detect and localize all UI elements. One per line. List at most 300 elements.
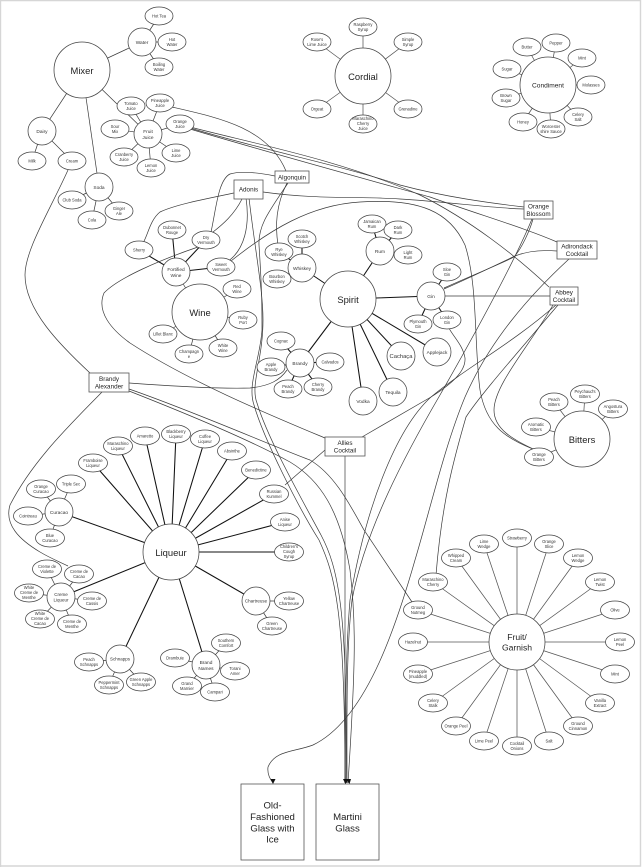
node: Creme de Cacao: Creme de (70, 569, 88, 574)
node: Rum: Rum (375, 249, 385, 255)
glass box: Martini Glass: Glass (335, 823, 360, 834)
arrowhead: Old-Fashioned (270, 779, 276, 784)
node: Celery Stalk: Celery (427, 698, 439, 703)
node: Bitters: Bitters (569, 434, 596, 445)
node: Grand Marnier: Grand (181, 681, 193, 686)
node: Wine: Wine (189, 307, 211, 318)
node: Vanilla Extract: Vanilla (594, 698, 606, 703)
node: Peppermint Schnapps: Schnapps (100, 685, 118, 690)
node: Fortified Wine: Fortified (167, 268, 185, 273)
node: Sour Mix: Mix (112, 129, 118, 134)
node: Lime Wedge: Wedge (478, 544, 491, 549)
node: Champagne: e (188, 354, 191, 359)
node: Rye Whiskey: Rye (275, 247, 283, 252)
node: Green Chartreuse (258, 617, 286, 635)
node: Brandy (286, 349, 314, 377)
node: Framboise Liqueur: Liqueur (86, 463, 100, 468)
node: Brand Names: Brand (200, 661, 212, 666)
node: Cognac (267, 332, 295, 350)
node: Cocktail Onions: Onions (511, 746, 523, 751)
node: Blue Curacao: Blue (46, 533, 54, 538)
node: Vodka: Vodka (356, 399, 370, 405)
node: Jamaican Rum (358, 215, 386, 233)
node: Grenadine: Grenadine (398, 107, 418, 112)
node: Tomato Juice: Tomato (124, 101, 138, 106)
cocktail box: Orange Blossom (524, 201, 553, 219)
node: Southern Comfort: Comfort (219, 643, 234, 648)
node: Brand Names: Names (198, 666, 214, 672)
node: Lemon Peel (606, 633, 634, 651)
node: Cola: Cola (88, 218, 97, 223)
node: Strawberry: Strawberry (507, 536, 528, 541)
node: Red Wine (223, 280, 251, 298)
node: White Creme de Cacao: Creme de (31, 616, 50, 621)
node: Applejack: Applejack (427, 350, 448, 356)
node: Plymouth Gin: Plymouth (409, 319, 427, 324)
node: White Creme de Menthe: White (24, 585, 34, 590)
node: Creme Liqueur: Creme (54, 592, 68, 597)
node: Peach Bitters: Peach (548, 397, 560, 402)
node: Framboise Liqueur: Framboise (83, 458, 103, 463)
node: Cocktail Onions (502, 737, 532, 755)
node: Hazelnut: Hazelnut (405, 640, 422, 645)
cluster: Mixer (18, 7, 194, 229)
node: Olive: Olive (610, 608, 620, 613)
node: Lime Peel (470, 732, 498, 750)
node: Lemon Wedge: Lemon (572, 553, 584, 558)
node: Maraschino Cherry Juice (349, 115, 377, 133)
cocktail box: Orange Blossom: Blossom (526, 211, 551, 218)
cluster: Cordial (303, 18, 422, 133)
node: Maraschino Cherry Juice: Maraschino (352, 116, 374, 121)
node: Calvados: Calvados (321, 360, 339, 365)
node: Triple Sec: Triple Sec (62, 482, 80, 487)
node: Creme Liqueur (47, 583, 75, 611)
node: Orange Peel: Orange Peel (444, 724, 468, 729)
node: Grand Marnier: Marnier (180, 686, 195, 691)
node: Aromatic Bitters: Aromatic (528, 422, 544, 427)
node: White Wine: Wine (218, 348, 228, 353)
node: Maraschino Cherry Juice: Juice (358, 126, 368, 131)
node: Peach Bitters: Bitters (548, 402, 560, 407)
cluster: Fruit/Garnish (398, 529, 634, 755)
node: Celery Salt (564, 108, 592, 126)
node: Dark Rum (384, 221, 412, 239)
node: Brown Sugar: Brown (500, 93, 512, 98)
node: Tomato Juice (117, 97, 145, 115)
cocktail box: Abbey Cocktail: Cocktail (553, 297, 575, 304)
node: Celery Salt: Celery (572, 112, 584, 117)
node: Apple Brandy: Apple (266, 362, 276, 367)
cocktail box: Algonquin (275, 171, 309, 183)
node: Worcestershire Sauce: Worcester (542, 124, 560, 129)
node: Aromatic Bitters (522, 418, 550, 436)
node: Ruby Port: Ruby (238, 315, 248, 320)
node: Ginger Ale: Ale (116, 211, 123, 216)
node: Blackberry Liqueur: Liqueur (169, 434, 183, 439)
node: Absinthe: Absinthe (224, 449, 241, 454)
node: Blue Curacao: Curacao (42, 538, 58, 543)
cocktail box: Brandy Alexander: Brandy (99, 376, 119, 383)
node: Peppermint Schnapps: Peppermint (99, 680, 119, 685)
cluster: Spirit (257, 215, 461, 415)
node: Sloe Gin: Gin (444, 272, 451, 277)
node: Blue Curacao (36, 529, 64, 547)
node: Plymouth Gin: Gin (415, 324, 422, 329)
node: Olive (600, 601, 630, 619)
node: Coffee Liqueur: Liqueur (198, 439, 212, 444)
glass box: Martini Glass: Martini (333, 812, 362, 823)
node: Sherry: Sherry (133, 248, 146, 253)
node: Chartreuse: Chartreuse (245, 599, 268, 604)
node: Aromatic Bitters: Bitters (530, 427, 542, 432)
node: Club Soda (58, 191, 86, 209)
node: Calvados (316, 353, 344, 371)
node: Rose's Lime Juice: Rose's (311, 37, 323, 42)
node: Pineapple muddled (404, 665, 432, 683)
node: Fruit/Garnish (489, 614, 545, 670)
node: Cointreau (14, 507, 42, 525)
node: Ginger Ale (105, 202, 133, 220)
node: Dry Vermouth: Dry (203, 235, 209, 240)
glass box: Old-Fashioned Glass with Ice: Old- (263, 800, 282, 812)
node: Ground Cinnamon: Ground (571, 721, 585, 726)
node: Bourbon Whiskey (263, 270, 291, 288)
node: London Gin (433, 311, 461, 329)
node: Orgeat: Orgeat (311, 107, 324, 112)
node: Framboise Liqueur (78, 454, 108, 472)
node: Peach Brandy: Brandy (282, 389, 295, 394)
node: Orange Juice: Orange (173, 119, 187, 124)
node: Children's Cough Syrup: Cough (283, 549, 296, 554)
node: Coffee Liqueur: Coffee (199, 434, 211, 439)
node: Peach Schnapps: Peach (83, 657, 95, 662)
node: Cachaca: Cachaça (390, 354, 413, 360)
node: Dark Rum: Dark (394, 225, 402, 230)
node: Orange Bitters: Bitters (533, 457, 545, 462)
node: Maraschino Cherry Juice: Cherry (357, 121, 370, 126)
node: Fruit Juice (134, 120, 162, 148)
cocktail box: Algonquin: Algonquin (278, 174, 307, 182)
node: Salt: Salt (545, 739, 553, 744)
node: Lime Juice: Juice (171, 153, 181, 158)
node: Raspberry Syrup (349, 18, 377, 36)
node: Cream (58, 152, 86, 170)
node: Angostura Bitters (598, 400, 628, 418)
node: Chartreuse (242, 587, 270, 615)
node: Orange Curacao: Curacao (33, 489, 49, 494)
node: Lemon Wedge: Wedge (572, 558, 585, 563)
node: Soda: Soda (93, 185, 105, 191)
node: Hot Tea (145, 7, 173, 25)
node: Fruit Juice: Juice (142, 135, 154, 141)
node: Lemon Wedge (564, 549, 592, 567)
node: Cachaca (387, 342, 415, 370)
node: Creme de Violette: Violette (40, 569, 55, 574)
node: Dairy: Dairy (36, 129, 48, 135)
node: Hot Water: Water (167, 42, 178, 47)
node: Cream: Cream (66, 159, 79, 164)
node: Simple Syrup: Syrup (403, 42, 414, 47)
node: Condiment: Condiment (532, 82, 564, 90)
node: Curacao (45, 498, 73, 526)
glass box: Old-Fashioned Glass with Ice (241, 784, 304, 860)
node: Lemon Twist: Twist (595, 582, 606, 587)
node: Jamaican Rum: Rum (368, 224, 377, 229)
node: Cherry Brandy: Brandy (312, 387, 325, 392)
node: Cranberry Juice: Juice (119, 157, 129, 162)
node: Champagne: Champagn (179, 349, 199, 354)
node: Peach Bitters (540, 393, 568, 411)
node: Ground Nutmeg: Nutmeg (411, 610, 426, 615)
cocktail box: Brandy Alexander (89, 373, 129, 392)
node: White Creme de Menthe: Menthe (22, 595, 37, 600)
node: Light Rum: Light (404, 250, 412, 255)
node: Blackberry Liqueur (162, 425, 190, 443)
node: White Wine: White (218, 343, 228, 348)
node: Dry Vermouth (192, 231, 220, 249)
node: Lime Juice (162, 144, 190, 162)
node: Russian Kummel: Kummel (266, 494, 282, 499)
node: Pepper: Pepper (549, 41, 563, 46)
node: Liqueur: Liqueur (155, 547, 187, 558)
node: Pineapple Juice: Pineapple (151, 98, 169, 103)
node: Boiling Water: Water (154, 67, 165, 72)
node: Torani Amer: Amer (230, 671, 241, 676)
node: Yellow Chartreuse: Yellow (283, 596, 295, 601)
node: Lemon Juice: Lemon (145, 163, 157, 168)
node: Orange Bitters: Orange (532, 452, 546, 457)
node: Milk (18, 152, 46, 170)
node: Cranberry Juice (110, 148, 138, 166)
node: Ground Cinnamon (564, 717, 592, 735)
node: Coffee Liqueur (190, 430, 220, 448)
node: Club Soda: Club Soda (62, 198, 82, 203)
node: Peach Brandy (274, 380, 302, 398)
node: Hazelnut (398, 633, 428, 651)
node: Lemon Twist: Lemon (594, 577, 606, 582)
node: Whipped Cream: Whipped (448, 553, 464, 558)
node: Creme de Violette (32, 560, 62, 578)
node: London Gin: Gin (444, 320, 451, 325)
node: Raspberry Syrup: Syrup (358, 27, 369, 32)
node: Mixer (54, 42, 110, 98)
cocktail box: Adonis (234, 180, 263, 199)
node: Scotch Whiskey: Whiskey (294, 239, 311, 244)
node: Amaretto: Amaretto (137, 434, 154, 439)
node: White Creme de Cacao: White (35, 611, 45, 616)
node: Creme Liqueur: Liqueur (53, 597, 69, 602)
node: Dry Vermouth: Vermouth (197, 240, 215, 245)
node: Dark Rum: Rum (394, 230, 403, 235)
node: Red Wine: Red (233, 284, 241, 289)
node: Mint: Mint (578, 56, 587, 61)
node: Brown Sugar: Sugar (501, 98, 512, 103)
node: Lemon Juice: Juice (146, 168, 156, 173)
node: Anise Liqueur: Liqueur (278, 522, 292, 527)
node: Children's Cough Syrup: Children's (280, 544, 298, 549)
node: Peppermint Schnapps (94, 676, 124, 694)
node: Creme de Menthe: Menthe (65, 624, 80, 629)
node: Bourbon Whiskey: Whiskey (269, 279, 286, 284)
node: Pineapple Juice: Juice (155, 103, 165, 108)
node: Lillet Blanc: Lillet Blanc (153, 332, 173, 337)
node: Curacao: Curacao (50, 510, 68, 516)
node: Scotch Whiskey (288, 230, 316, 248)
node: Cognac: Cognac (274, 339, 288, 344)
node: Whipped Cream (442, 549, 470, 567)
node: Ground Nutmeg: Ground (411, 605, 425, 610)
node: Apple Brandy (257, 358, 285, 376)
node: Worcestershire Sauce (537, 120, 565, 138)
node: Orange Juice: Juice (175, 124, 185, 129)
node: Green Apple Schnapps (126, 673, 156, 691)
node: Dairy (28, 117, 56, 145)
cocktail box: Orange Blossom: Orange (528, 204, 549, 210)
glass box: Martini Glass (316, 784, 379, 860)
node: White Creme de Cacao: Cacao (34, 621, 47, 626)
node: Simple Syrup: Simple (402, 37, 414, 42)
node: Rum (366, 237, 394, 265)
node: Russian Kummel: Russian (267, 489, 281, 494)
node: Cherry Brandy: Cherry (312, 382, 324, 387)
node: Wine (172, 284, 228, 340)
node: Light Rum: Rum (404, 255, 413, 260)
node: Benedictine: Benedictine (245, 468, 267, 473)
node: Sweet Vermouth: Sweet (215, 262, 227, 267)
node: Salt (534, 732, 564, 750)
node: London Gin: London (440, 315, 454, 320)
node: Triple Sec (56, 475, 86, 493)
node: Milk: Milk (28, 159, 37, 164)
node: Scotch Whiskey: Scotch (296, 234, 308, 239)
node: Rye Whiskey (265, 243, 293, 261)
node: Torani Amer (220, 662, 250, 680)
node: Strawberry (502, 529, 532, 547)
node: Lemon Twist (586, 573, 614, 591)
node: Bourbon Whiskey: Bourbon (269, 274, 285, 279)
node: Apple Brandy: Brandy (265, 367, 278, 372)
node: Fortified Wine: Wine (171, 273, 182, 279)
node: Brown Sugar (492, 89, 520, 107)
cocktail box: Abbey Cocktail: Abbey (555, 290, 573, 296)
node: Rose's Lime Juice (303, 33, 331, 51)
node: Whiskey: Whiskey (293, 266, 312, 272)
node: Tequila (379, 378, 407, 406)
arrowheads: Martini (343, 779, 351, 784)
node: Butter: Butter (522, 45, 533, 50)
glass box: Old-Fashioned Glass with Ice: Fashioned (250, 812, 295, 823)
node: Hot Water (158, 33, 186, 51)
node: Creme de Menthe: Creme de (63, 619, 81, 624)
node: Spirit: Spirit (337, 294, 359, 305)
node: Molasses: Molasses (582, 83, 600, 88)
node: Ruby Port (229, 311, 257, 329)
node: Orange Peel (442, 717, 470, 735)
node: Boiling Water: Boiling (153, 62, 165, 67)
node: Drambuie: Drambuie (166, 656, 185, 661)
node: Green Chartreuse: Chartreuse (262, 626, 283, 631)
node: Dubonnet Rouge: Rouge (166, 230, 179, 235)
node: Maraschino Liqueur (104, 437, 132, 455)
node: Peychaud's Bitters: Peychaud's (574, 389, 596, 394)
node: Vanilla Extract: Extract (594, 703, 607, 708)
node: Cocktail Onions: Cocktail (510, 741, 524, 746)
node: Grand Marnier (172, 677, 202, 695)
node: Rose's Lime Juice: Lime Juice (307, 42, 328, 47)
node: Brand Names (192, 651, 220, 679)
node: Jamaican Rum: Jamaican (363, 219, 381, 224)
node: Soda (85, 173, 113, 201)
node: Blackberry Liqueur: Blackberry (166, 429, 186, 434)
cluster: Liqueur (14, 425, 304, 701)
node: Celery Stalk (418, 694, 448, 712)
node: Benedictine (242, 461, 270, 479)
node: Lemon Peel: Peel (616, 642, 624, 647)
cocktail box: Allies Cocktail: Cocktail (334, 447, 356, 454)
node: Water (128, 28, 156, 56)
node: Lime Juice: Lime (172, 148, 180, 153)
node: White Creme de Menthe (14, 584, 44, 602)
node: Creme de Cacao (64, 565, 94, 583)
node: Yellow Chartreuse (274, 592, 304, 610)
node: Hot Water: Hot (169, 37, 175, 42)
cocktail box: Adirondack Cocktail: Cocktail (566, 251, 588, 258)
node: Lime Wedge (470, 535, 498, 553)
node: Creme de Cassis: Creme de (83, 596, 101, 601)
node: Mint: Mint (611, 672, 620, 677)
node: Green Chartreuse: Green (266, 621, 278, 626)
cocktail box: Adirondack Cocktail: Adirondack (561, 244, 593, 250)
node: Orange Slice (534, 535, 564, 553)
node: Maraschino Liqueur: Liqueur (111, 446, 125, 451)
node: Cola (78, 211, 106, 229)
node: Creme de Cassis: Cassis (86, 601, 98, 606)
node: Campari (200, 683, 230, 701)
node: Sloe Gin (433, 263, 461, 281)
node: Campari: Campari (207, 690, 223, 695)
node: Sour Mix: Sour (111, 124, 119, 129)
node: Angostura Bitters: Bitters (607, 409, 619, 414)
node: Green Apple Schnapps: Schnapps (132, 682, 150, 687)
node: Maraschino Liqueur: Maraschino (107, 441, 129, 446)
node: Orange Slice: Orange (542, 539, 556, 544)
node: Cherry Brandy (304, 378, 332, 396)
node: Creme de Violette: Creme de (38, 564, 56, 569)
glass box: Old-Fashioned Glass with Ice: Ice (266, 835, 279, 846)
connector curves: cocktail recipes (9, 107, 569, 783)
node: White Wine (209, 339, 237, 357)
node: Rye Whiskey: Whiskey (271, 252, 288, 257)
node: Maraschino Cherry: Maraschino (422, 577, 444, 582)
node: Maraschino Cherry (418, 573, 448, 591)
node: Orange Juice (166, 115, 194, 133)
node: Lime Wedge: Lime (480, 539, 488, 544)
node: Torani Amer: Torani (229, 666, 241, 671)
node: Angostura Bitters: Angostura (604, 404, 622, 409)
cocktail box: Allies Cocktail: Allies (337, 440, 353, 447)
node: Mixer: Mixer (71, 65, 93, 76)
node: Liqueur (143, 524, 199, 580)
cocktail box: Allies Cocktail (325, 437, 365, 456)
node: Southern Comfort (212, 634, 240, 652)
node: Fortified Wine (162, 258, 190, 286)
node: Schnapps: Schnapps (110, 657, 131, 662)
node: Creme de Menthe (58, 615, 86, 633)
node: Schnapps (106, 645, 134, 673)
node: Children's Cough Syrup: Syrup (284, 554, 295, 559)
node: Absinthe (218, 442, 246, 460)
